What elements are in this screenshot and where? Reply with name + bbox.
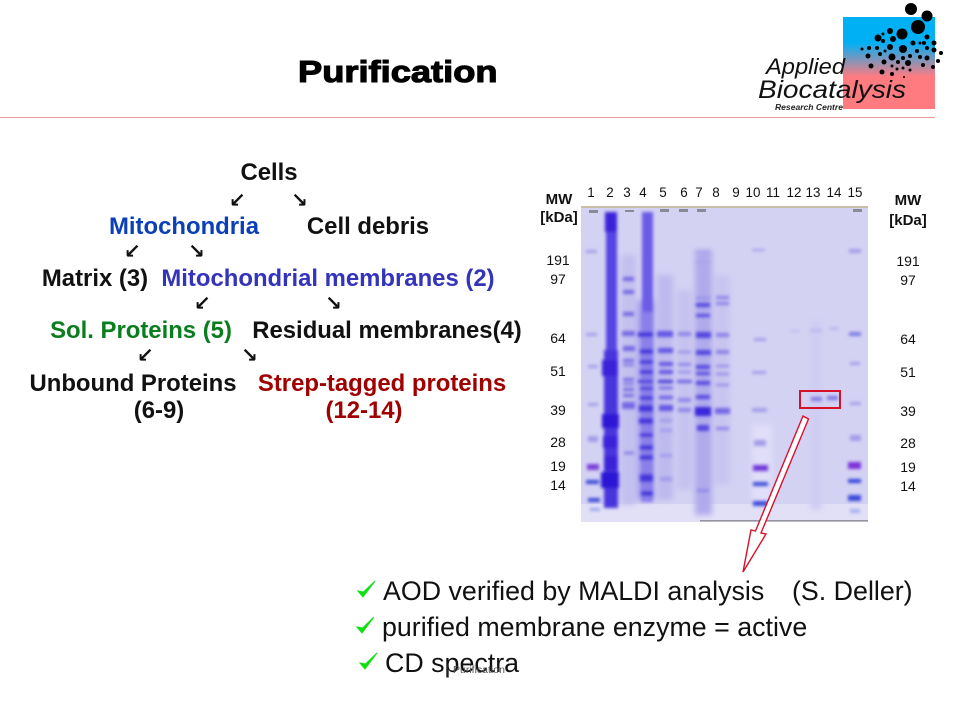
left MW scale: 28: [550, 434, 566, 450]
lane numbers: 12: [787, 185, 801, 200]
result: active enzyme: purified membrane enzyme = active: [382, 612, 807, 642]
right MW scale: 28: [900, 435, 916, 451]
gel selection box: [799, 390, 841, 409]
arrow: membranes to soluble proteins: ↙: [194, 291, 211, 315]
left MW scale: 191: [546, 252, 570, 268]
right MW scale: 19: [900, 459, 916, 475]
lane numbers: 6: [680, 185, 688, 200]
footer label: Purification: [453, 664, 505, 676]
lane 2: [606, 212, 617, 352]
left MW scale: 97: [550, 271, 566, 287]
step: Strep lanes: (12-14): [325, 397, 403, 424]
step: Sol. Proteins: Sol. Proteins (5): [50, 317, 232, 344]
arrow to results: [742, 415, 810, 572]
left MW scale: 64: [550, 330, 566, 346]
arrow: mitochondria to matrix: ↙: [124, 239, 141, 263]
right MW scale: 51: [900, 364, 916, 380]
lane numbers: 9: [732, 185, 740, 200]
lane 15 markers: [849, 249, 861, 441]
logo: Applied Biocatalysis: Biocatalysis: [758, 76, 906, 104]
lane numbers: 8: [712, 185, 720, 200]
lane 10 markers: [752, 249, 767, 446]
lane 8: [715, 296, 730, 430]
left MW scale: [kDa]: [540, 209, 578, 226]
lane 6: [677, 332, 692, 412]
logo: Applied Biocatalysis: Applied: [764, 54, 846, 79]
lane numbers: 10: [746, 185, 760, 200]
arrow: mitochondria to membranes: ↘: [188, 239, 205, 263]
arrow: cells to mitochondria: ↙: [229, 188, 246, 212]
right MW scale: [kDa]: [889, 212, 927, 229]
step: Mitochondria: Mitochondria: [109, 213, 259, 240]
right MW scale: MW: [895, 192, 921, 209]
purification flow diagram: [29, 159, 522, 424]
arrow: cells to debris: ↘: [291, 188, 308, 212]
wells: [581, 206, 868, 213]
lane numbers: 7: [695, 185, 703, 200]
step: Residual membranes: Residual membranes(4): [252, 317, 522, 344]
lane 5: [657, 331, 673, 411]
right MW scale: [889, 192, 927, 494]
left MW scale: 19: [550, 458, 566, 474]
right MW scale: 191: [896, 253, 920, 269]
result: AOD verified: [356, 576, 913, 606]
step: Unbound lanes: (6-9): [134, 397, 184, 424]
right MW scale: 64: [900, 331, 916, 347]
arrow: membranes to residual: ↘: [325, 291, 342, 315]
arrow: soluble to strep-tagged: ↘: [241, 343, 258, 367]
lane numbers: 14: [827, 185, 841, 200]
lane numbers: 2: [606, 185, 614, 200]
lane 3: [622, 277, 635, 454]
lane numbers: 11: [766, 185, 780, 200]
lanes 12-14 faint: [790, 327, 839, 401]
step: Cells: Cells: [240, 159, 298, 186]
logo: Applied Biocatalysis: Research Centre: [775, 103, 844, 112]
title: Purification: [298, 54, 498, 89]
lane numbers: 3: [623, 185, 631, 200]
step: Matrix: Matrix (3): [42, 265, 148, 292]
left MW scale: MW: [546, 191, 572, 208]
right MW scale: 14: [900, 478, 916, 494]
lane numbers: 4: [639, 185, 647, 200]
left MW scale: 39: [550, 402, 566, 418]
step: Strep-tagged proteins: Strep-tagged proteins: [258, 370, 506, 397]
logo: Applied Biocatalysis: [758, 3, 943, 112]
step: Unbound Proteins: Unbound Proteins: [29, 370, 237, 397]
header rule: [0, 117, 935, 118]
gel image: [581, 206, 868, 522]
lane numbers: 1: [587, 185, 595, 200]
result: CD spectra: CD spectra: [385, 648, 519, 678]
left MW scale: [540, 191, 578, 493]
lane numbers: 13: [806, 185, 820, 200]
right MW scale: 39: [900, 403, 916, 419]
result: AOD verified: AOD verified by MALDI analysis: [383, 576, 764, 606]
lane 7: [695, 297, 711, 492]
left MW scale: 14: [550, 477, 566, 493]
left MW scale: 51: [550, 363, 566, 379]
right MW scale: 97: [900, 272, 916, 288]
arrow: soluble to unbound: ↙: [137, 343, 154, 367]
lane numbers: [587, 185, 862, 200]
lane 1 markers: [586, 250, 598, 442]
lane 4: [642, 212, 653, 312]
step: Mitochondrial membranes: Mitochondrial membranes (2): [161, 265, 495, 292]
result: AOD verified: (S. Deller): [792, 576, 913, 606]
lane numbers: 15: [848, 185, 862, 200]
step: Cell debris: Cell debris: [307, 213, 429, 240]
lane numbers: 5: [659, 185, 667, 200]
